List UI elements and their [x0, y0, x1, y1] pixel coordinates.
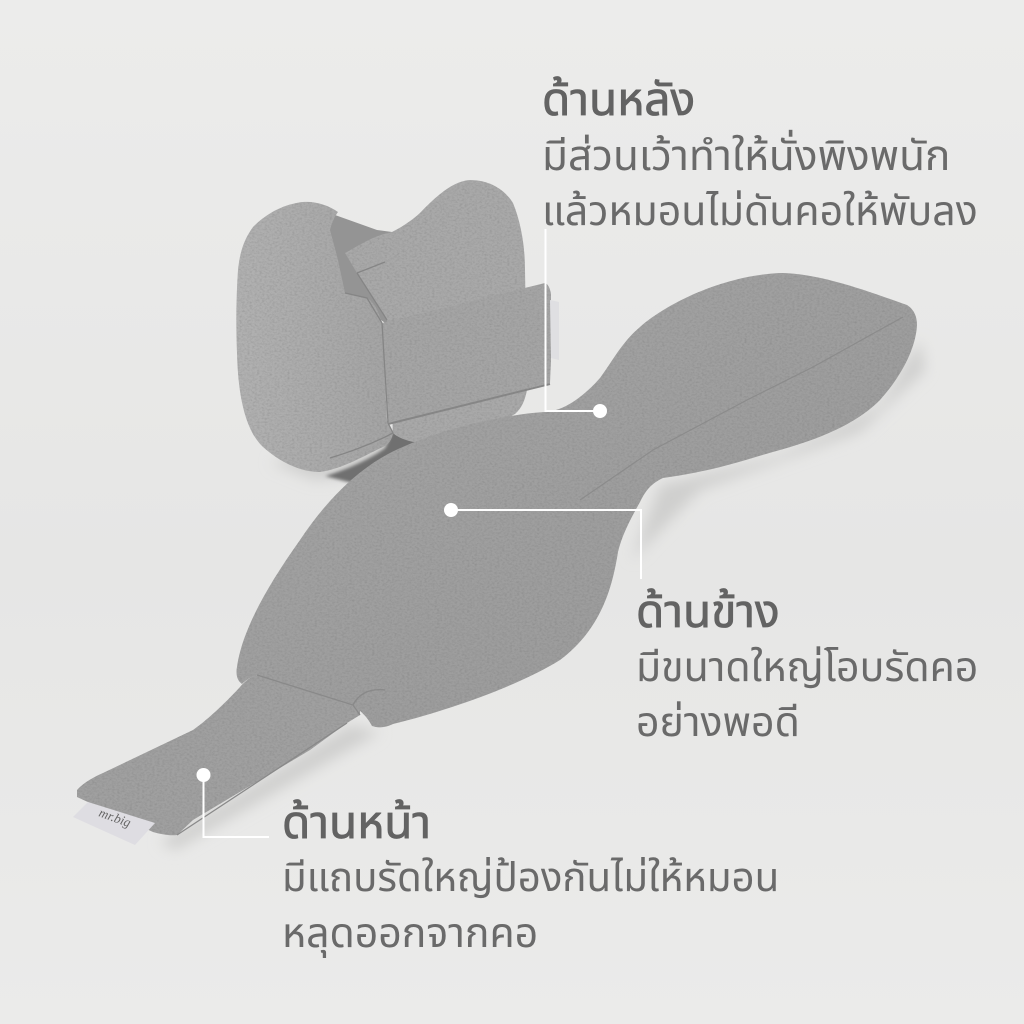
text block: front: หลุดออกจากคอ	[282, 910, 538, 956]
front strap	[77, 660, 360, 835]
text block: front: ด้านหน้า	[282, 796, 431, 848]
text block: side: มีขนาดใหญ่โอบรัดคอ	[636, 644, 978, 690]
text block: back: มีส่วนเว้าทำให้นั่งพิงพนัก	[542, 132, 950, 178]
text block: side	[636, 585, 978, 745]
label tag: mr.big	[97, 805, 133, 830]
text block: side: อย่างพอดี	[636, 699, 800, 745]
contact shadow	[325, 430, 425, 485]
inner fold	[328, 215, 420, 330]
small tag	[550, 300, 559, 360]
text block: back	[542, 73, 978, 234]
right lobe	[345, 180, 527, 443]
text block: back: ด้านหลัง	[542, 73, 695, 125]
text block: back: แล้วหมอนไม่ดันคอให้พับลง	[542, 188, 978, 234]
body	[237, 273, 917, 727]
strap	[382, 283, 551, 423]
left lobe	[236, 202, 393, 472]
label tag	[73, 802, 155, 845]
soft shadows	[160, 340, 925, 850]
text block: front: มีแถบรัดใหญ่ป้องกันไม่ให้หมอน	[282, 855, 779, 900]
main pillow	[73, 273, 917, 845]
back pillow	[236, 180, 559, 485]
pleat creases	[177, 675, 385, 835]
seam	[580, 317, 903, 500]
text block: side: ด้านข้าง	[636, 585, 780, 637]
text block: front	[282, 796, 779, 958]
creases	[330, 262, 393, 458]
strap edge shadow	[388, 384, 550, 424]
